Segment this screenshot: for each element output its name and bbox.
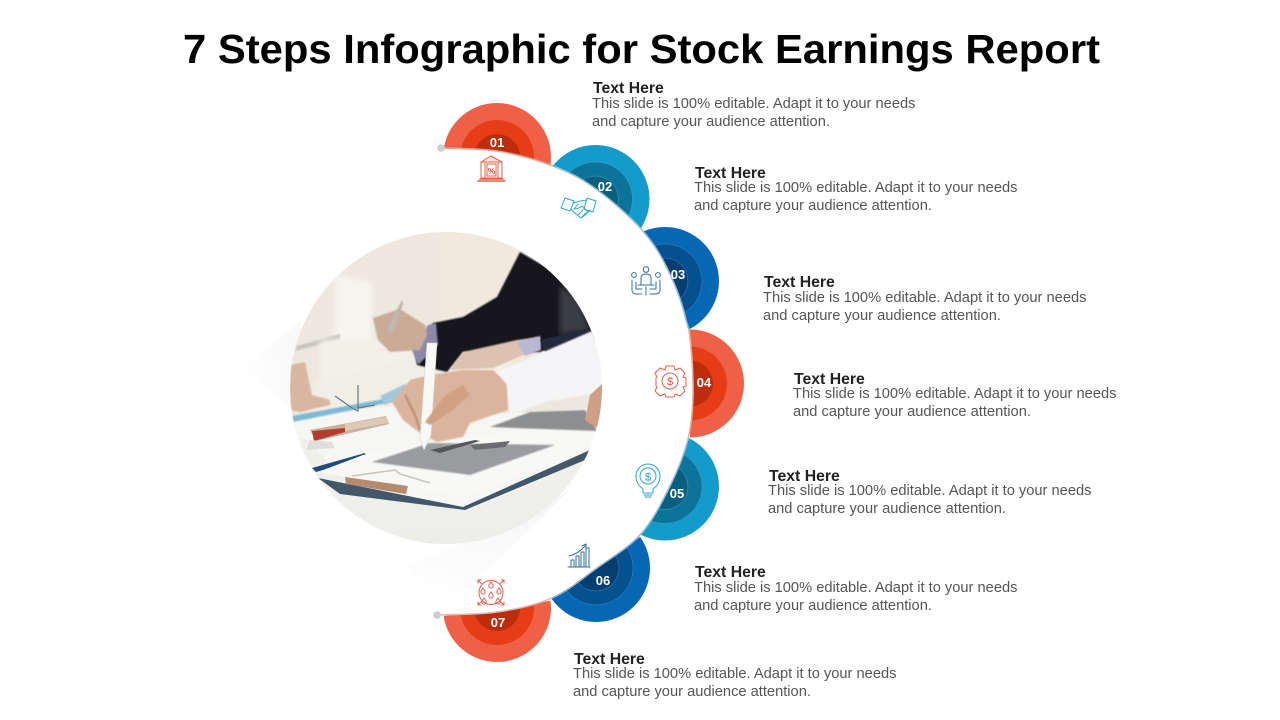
step 5 icon: lightbulb with dollar xyxy=(636,464,660,497)
step 6 text: This slide is 100% editable. Adapt it to your needs xyxy=(694,580,1017,596)
step 3 semicircle badge xyxy=(644,227,719,329)
step 7 text: and capture your audience attention. xyxy=(573,684,811,700)
step 4 semicircle badge xyxy=(690,330,744,438)
title: 7 Steps Infographic for Stock Earnings Report xyxy=(183,26,1100,72)
step 1 text: This slide is 100% editable. Adapt it to your needs xyxy=(592,96,915,112)
step 2 text: and capture your audience attention. xyxy=(694,198,932,214)
step 5 text: This slide is 100% editable. Adapt it to your needs xyxy=(768,483,1091,499)
step 6 icon: growth chart xyxy=(568,544,590,567)
step numbers: 06 xyxy=(596,573,610,588)
step 4 text: Text Here xyxy=(794,371,865,388)
photo drop shadow xyxy=(240,322,570,612)
step 2 icon: handshake xyxy=(561,198,596,218)
step 1 text: and capture your audience attention. xyxy=(592,114,830,130)
step 3 text: This slide is 100% editable. Adapt it to your needs xyxy=(763,290,1086,306)
step 4 text: and capture your audience attention. xyxy=(793,404,1031,420)
step 6 text: Text Here xyxy=(695,564,766,581)
step 3 icon: meeting xyxy=(632,267,660,295)
step 6 text xyxy=(694,564,1017,614)
photo: business people reviewing a chart xyxy=(290,232,605,544)
step 1 text: Text Here xyxy=(593,80,664,97)
step 6 text: and capture your audience attention. xyxy=(694,598,932,614)
step 2 semicircle badge xyxy=(553,145,650,228)
step 3 text: and capture your audience attention. xyxy=(763,308,1001,324)
step 7 text xyxy=(573,651,896,700)
step 7 icon: network of drops xyxy=(478,580,504,605)
step 6 semicircle badge xyxy=(552,537,650,622)
step 1 semicircle badge xyxy=(444,103,551,164)
step 4 icon: gear with dollar: $ xyxy=(667,376,673,388)
step numbers: 01 xyxy=(490,135,504,150)
step 5 text: and capture your audience attention. xyxy=(768,501,1006,517)
step numbers: 04 xyxy=(697,375,712,390)
step 7 text: This slide is 100% editable. Adapt it to your needs xyxy=(573,666,896,682)
arc start dot xyxy=(437,144,445,152)
step 4 text: This slide is 100% editable. Adapt it to your needs xyxy=(793,386,1116,402)
step 3 text xyxy=(763,274,1086,324)
step 5 text: Text Here xyxy=(769,468,840,485)
step 2 text: This slide is 100% editable. Adapt it to your needs xyxy=(694,180,1017,196)
step 3 text: Text Here xyxy=(764,274,835,291)
step numbers: 07 xyxy=(491,615,505,630)
step numbers xyxy=(490,135,712,630)
curved divider arc xyxy=(437,148,693,615)
step 2 text xyxy=(694,165,1017,214)
step 4 icon: gear with dollar xyxy=(655,366,686,397)
step 2 text: Text Here xyxy=(695,165,766,182)
step 5 semicircle badge xyxy=(641,438,719,540)
step numbers: 05 xyxy=(670,486,684,501)
step 1 text xyxy=(592,80,915,130)
step 5 icon: lightbulb with dollar: $ xyxy=(645,472,651,484)
step 1 icon: bank percent: % xyxy=(488,166,496,176)
step 7 text: Text Here xyxy=(574,651,645,668)
step 4 text xyxy=(793,371,1116,420)
step numbers: 03 xyxy=(671,267,685,282)
step 1 icon: bank percent xyxy=(478,156,505,181)
arc end dot xyxy=(433,611,441,619)
step 7 semicircle badge xyxy=(444,600,551,662)
white central shape xyxy=(437,148,693,615)
step numbers: 02 xyxy=(598,179,612,194)
step 5 text xyxy=(768,468,1091,517)
